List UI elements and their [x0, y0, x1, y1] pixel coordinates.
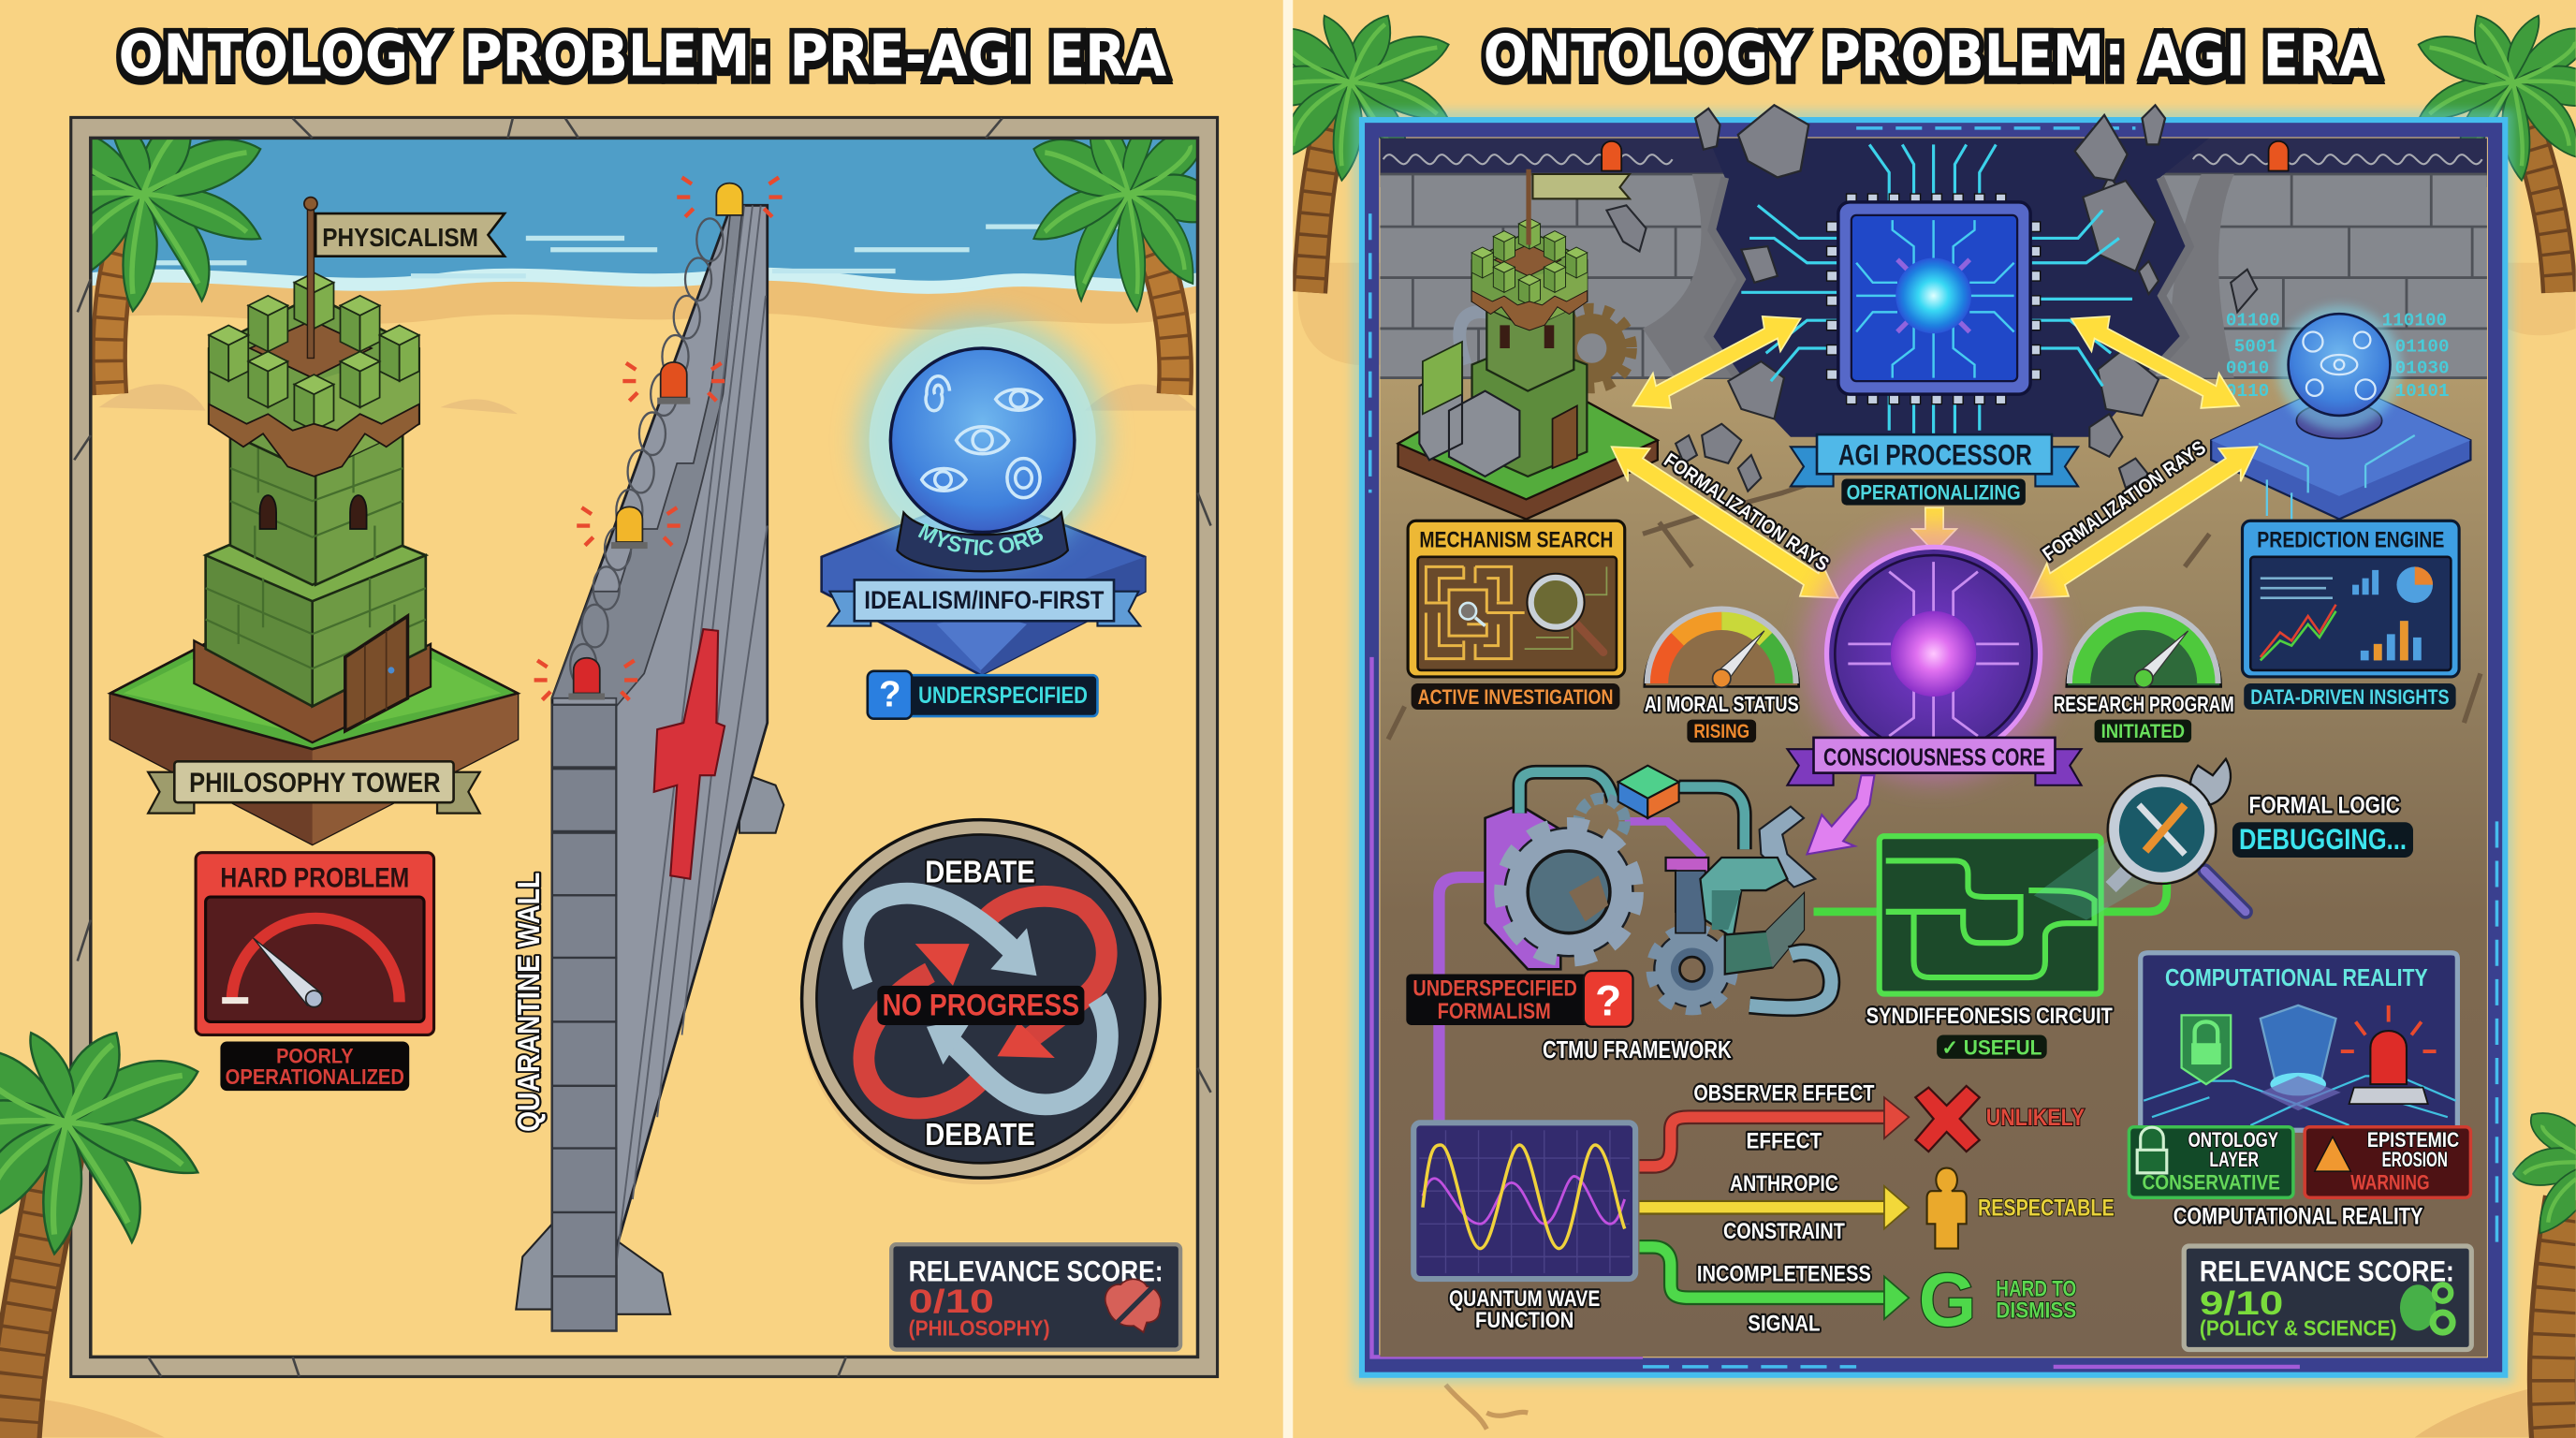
- tower door: [345, 616, 407, 731]
- alarm light: top: [677, 178, 783, 217]
- orb pedestal: [822, 492, 1145, 675]
- status: underspecified: UNDERSPECIFIED: [918, 683, 1088, 709]
- verdict: unlikely: UNLIKELY: [1986, 1106, 2085, 1131]
- icon: green lock: [2182, 1015, 2231, 1084]
- status: underspecified formalism: ?: [1595, 976, 1621, 1024]
- label: idealism/info-first: [828, 580, 1140, 626]
- alarm light: upper red: [622, 362, 724, 404]
- mini tower island: [1398, 169, 1658, 519]
- binary data: 5001: [2234, 337, 2277, 358]
- status: operationalizing: OPERATIONALIZING: [1847, 480, 2021, 504]
- tower foundation: [194, 640, 431, 742]
- label: idealism/info-first: IDEALISM/INFO-FIRST: [864, 585, 1105, 614]
- brick lines: [206, 447, 426, 668]
- gear behind tower: [1553, 309, 1632, 388]
- relevance score: pre-AGI: (PHILOSOPHY): [909, 1316, 1050, 1341]
- box: epistemic erosion: EPISTEMIC: [2367, 1128, 2459, 1152]
- hard problem gauge panel: [196, 853, 434, 1034]
- binary data: 01100: [2226, 310, 2280, 330]
- back gear: [1579, 799, 1625, 844]
- pipes: [1519, 772, 1745, 849]
- circuit wires outer: [1814, 871, 2167, 912]
- binary data: 0010: [2226, 358, 2269, 378]
- gauge: research program: INITIATED: [2101, 721, 2185, 742]
- verdict: hard to dismiss: HARD TO: [1996, 1277, 2076, 1301]
- status: data-driven insights: DATA-DRIVEN INSIGHTS: [2250, 685, 2450, 709]
- panel: prediction engine: [2242, 521, 2459, 677]
- palm tree: top right: [1032, 139, 1196, 395]
- circuit scene: [1380, 138, 2487, 1357]
- chip traces: [1856, 220, 2014, 378]
- label: CTMU framework: CTMU FRAMEWORK: [1543, 1037, 1732, 1064]
- icon: warning: [2315, 1137, 2350, 1171]
- icon: G: G: [1919, 1258, 1976, 1343]
- icon: brain and gears: [2400, 1284, 2452, 1332]
- quarantine wall: [516, 178, 783, 1330]
- status: poorly operationalized: [220, 1041, 409, 1091]
- relevance score: AGI: [2184, 1246, 2471, 1350]
- small gear: [1651, 928, 1734, 1010]
- flying rocks over frame: [1695, 105, 2165, 181]
- status: useful: ✓ USEFUL: [1941, 1036, 2042, 1060]
- orb ring: [870, 327, 1096, 553]
- label: debate top: DEBATE: [925, 855, 1035, 889]
- AGI processor chip: [1827, 194, 2041, 404]
- stone frame: [71, 117, 1218, 1376]
- palm tree: bottom left: [0, 1033, 198, 1438]
- binary data: 10101: [2395, 381, 2450, 402]
- label: syndiffeonesis: SYNDIFFEONESIS CIRCUIT: [1866, 1005, 2113, 1029]
- alarm light: lower red: [534, 658, 637, 700]
- background: right sand: [1290, 0, 2576, 1438]
- flying rocks: [1606, 176, 2257, 492]
- status: poorly operationalized: OPERATIONALIZED: [226, 1064, 404, 1089]
- panel: AGI era: [1255, 16, 2576, 1438]
- box: ontology layer: [2129, 1127, 2293, 1197]
- icon: red siren: [2341, 1005, 2437, 1104]
- icon: crossed brain: [1105, 1279, 1161, 1332]
- gauge: research program: RESEARCH PROGRAM: [2054, 692, 2234, 716]
- status: underspecified formalism: UNDERSPECIFIED: [1412, 976, 1577, 1001]
- arrow: anthropic constraint: ANTHROPIC: [1730, 1172, 1838, 1196]
- purple arrow to CTMU: [1807, 775, 1874, 854]
- top sky band: [1380, 138, 2487, 187]
- panel: computational reality: COMPUTATIONAL REALITY: [2165, 963, 2428, 991]
- barbed wire: [1383, 154, 2482, 164]
- alarm light: middle yellow: [577, 506, 681, 549]
- label: formalization rays right: FORMALIZATION RAYS: [2039, 437, 2210, 565]
- red cross: [654, 629, 724, 879]
- status: poorly operationalized: POORLY: [276, 1044, 354, 1067]
- broken wall: [1380, 174, 2487, 378]
- ground: [1380, 370, 2487, 1357]
- gauge needle: [254, 938, 322, 1005]
- label: debate bottom: DEBATE: [925, 1118, 1035, 1152]
- orb label path: [916, 536, 1051, 555]
- relevance score: pre-AGI: 0/10: [909, 1284, 994, 1320]
- label: formalization rays left: FORMALIZATION RAYS: [1660, 449, 1833, 576]
- machines: [1419, 359, 1519, 477]
- gauge arc: [232, 918, 400, 1002]
- gauge: AI moral status: AI MORAL STATUS: [1645, 692, 1799, 716]
- tower island base: [110, 588, 518, 844]
- wall front steps: [552, 205, 742, 707]
- loop arrowheads: [927, 928, 1037, 1064]
- icon: question: [1584, 971, 1632, 1027]
- box: epistemic erosion: WARNING: [2350, 1170, 2430, 1194]
- panel: prediction engine: PREDICTION ENGINE: [2257, 528, 2444, 552]
- yellow arrows: [1612, 316, 2257, 598]
- binary data: [2226, 310, 2450, 402]
- flag: [1526, 169, 1531, 244]
- label: philosophy tower: [148, 761, 480, 814]
- panel: mechanism search: [1408, 521, 1625, 677]
- orb symbols: [922, 376, 1042, 498]
- arrow: incompleteness signal: INCOMPLETENESS: [1697, 1263, 1871, 1287]
- CTMU framework machine: [1486, 766, 1832, 1010]
- verdict: hard to dismiss: [1996, 1277, 2076, 1323]
- icon: crystal cube: [2261, 1005, 2341, 1110]
- core center: [1891, 611, 1976, 697]
- icon: magnifier: [1527, 574, 1603, 653]
- sand cracks: [1445, 1385, 1528, 1430]
- wall bricks: [552, 705, 616, 1330]
- broken gear piece: [1760, 807, 1815, 888]
- philosophy tower: [110, 198, 518, 844]
- box: ontology layer: ONTOLOGY: [2188, 1128, 2278, 1152]
- label: consciousness core: [1787, 738, 2082, 785]
- wall body: [552, 205, 768, 1330]
- neon frame: [1362, 120, 2505, 1375]
- tower crown: [209, 272, 419, 477]
- tower windows: [260, 495, 367, 529]
- orb sphere: [890, 348, 1075, 533]
- panel: computational reality: [2141, 953, 2457, 1130]
- loop: blue arrows: [854, 893, 1107, 1105]
- arrow: observer effect: EFFECT: [1747, 1130, 1822, 1154]
- palm tree: bottom right: [2415, 1101, 2576, 1438]
- screen grid: [1419, 1130, 1630, 1273]
- mystic orb: [820, 301, 1147, 720]
- charts: [2261, 579, 2333, 598]
- orb label: mystic orb: MYSTIC ORB: [917, 522, 1043, 556]
- orb stand: [897, 512, 1068, 571]
- mini crown: [1471, 218, 1588, 330]
- binary data: 01030: [2395, 358, 2450, 378]
- verdict: hard to dismiss: DISMISS: [1996, 1299, 2076, 1323]
- hole in wall: [1708, 138, 2209, 437]
- panel: mechanism search: MECHANISM SEARCH: [1419, 528, 1613, 552]
- chip rays: [1741, 144, 2132, 435]
- icon: red X: [1915, 1086, 1980, 1152]
- alarm lights on wall: [1602, 141, 2289, 170]
- arrow: anthropic constraint: CONSTRAINT: [1723, 1220, 1845, 1244]
- circuit floor: [2144, 1076, 2456, 1125]
- icon: debug magnifier: [2034, 759, 2246, 920]
- magenta wave: [1423, 1176, 1625, 1224]
- icon: lock: [2137, 1127, 2167, 1173]
- background: left sand: [0, 0, 1286, 1438]
- label: quantum wave function: [1449, 1287, 1600, 1333]
- panel: Pre-AGI era: [0, 23, 1219, 1438]
- box: epistemic erosion: EROSION: [2382, 1148, 2448, 1171]
- verdict: respectable: RESPECTABLE: [1978, 1196, 2115, 1221]
- relevance score: pre-AGI: RELEVANCE SCORE:: [909, 1255, 1164, 1288]
- icon: person: [1927, 1168, 1967, 1249]
- label: computational reality: COMPUTATIONAL REALITY: [2174, 1204, 2423, 1229]
- ground cracks: [1388, 485, 2481, 740]
- label: quantum wave function: FUNCTION: [1475, 1309, 1573, 1333]
- label: AGI processor: [1791, 434, 2078, 486]
- status: underspecified: ?: [879, 675, 901, 715]
- no progress label: NO PROGRESS: [883, 988, 1079, 1021]
- beach scene: [92, 139, 1196, 414]
- machine purple housing: [1486, 805, 1560, 969]
- quantum wave screen: [1413, 1123, 1635, 1279]
- curled pipe: [1749, 952, 1832, 1008]
- status: debugging: DEBUGGING...: [2239, 822, 2407, 856]
- relevance score: AGI: RELEVANCE SCORE:: [2200, 1255, 2454, 1288]
- binary data: 01100: [2395, 337, 2450, 358]
- relevance score: pre-AGI: [891, 1244, 1180, 1350]
- arrow: observer effect: OBSERVER EFFECT: [1693, 1082, 1875, 1107]
- palm tree: top left: [92, 139, 262, 395]
- label: formal logic: FORMAL LOGIC: [2249, 794, 2400, 819]
- relevance score: AGI: (POLICY & SCIENCE): [2200, 1316, 2396, 1341]
- wall buttresses: [516, 772, 783, 1314]
- status: active investigation: ACTIVE INVESTIGATION: [1418, 685, 1613, 709]
- label: AGI processor: AGI PROCESSOR: [1838, 438, 2032, 472]
- syndiffeonesis circuit: [1880, 836, 2101, 994]
- pie chart: [2396, 566, 2433, 603]
- plank: [1725, 894, 1804, 975]
- tower body: [1472, 342, 1587, 477]
- pipe: [1459, 312, 1486, 365]
- gauge: AI moral status: RISING: [1693, 721, 1749, 742]
- orb glow: [857, 315, 1107, 565]
- binary data: 0110: [2226, 381, 2269, 402]
- binary data: 110100: [2382, 310, 2447, 330]
- arrow: incompleteness signal: [1640, 1247, 1909, 1336]
- palm tree: top left: [1293, 14, 1450, 365]
- title: pre-AGI: ONTOLOGY PROBLEM: PRE-AGI ERA: [119, 23, 1167, 90]
- maze: [1426, 566, 1525, 659]
- status: underspecified: [868, 671, 1097, 719]
- faint blueprint: [1525, 566, 1606, 649]
- small magnifier: [1460, 603, 1486, 626]
- relevance score: AGI: 9/10: [2200, 1285, 2283, 1322]
- hole rubble fringe: [1708, 178, 2189, 394]
- palm trees and outer sand: [1255, 16, 2576, 1438]
- machine blocks: [1666, 858, 1708, 912]
- label: quarantine wall: QUARANTINE WALL: [512, 873, 547, 1132]
- arrow: anthropic constraint: [1640, 1172, 1909, 1244]
- arrow: observer effect: [1640, 1082, 1909, 1167]
- box: ontology layer: LAYER: [2209, 1148, 2259, 1171]
- gauge: AI moral status: [1645, 609, 1799, 742]
- palm tree: top right: [2419, 16, 2576, 335]
- label: philosophy tower: PHILOSOPHY TOWER: [189, 768, 441, 799]
- label: consciousness core: CONSCIOUSNESS CORE: [1823, 743, 2045, 771]
- status: underspecified formalism: FORMALISM: [1438, 1000, 1551, 1024]
- status: underspecified formalism: [1406, 971, 1632, 1027]
- flag: physicalism: PHYSICALISM: [322, 223, 478, 252]
- purple pipe: [1439, 877, 1488, 1121]
- arrow: incompleteness signal: SIGNAL: [1748, 1312, 1821, 1336]
- loop: red arrows: [864, 896, 1106, 1108]
- consciousness core: [1806, 526, 2061, 782]
- tower body: [206, 418, 426, 707]
- hard problem gauge panel: HARD PROBLEM: [220, 863, 409, 894]
- debate loop badge: [800, 820, 1162, 1184]
- mini orb platform: [2211, 305, 2470, 519]
- chip core: [1895, 257, 1971, 333]
- gauge: research program: [2054, 609, 2234, 742]
- large gear: [1501, 825, 1636, 960]
- title: AGI: ONTOLOGY PROBLEM: AGI ERA: [1484, 23, 2379, 90]
- flag: physicalism: [304, 198, 505, 359]
- box: ontology layer: CONSERVATIVE: [2142, 1170, 2280, 1194]
- frame glow: [1358, 117, 2507, 1376]
- cube: [1618, 766, 1679, 818]
- box: epistemic erosion: [2305, 1127, 2470, 1197]
- yellow wave: [1423, 1145, 1625, 1249]
- panel divider: [1283, 0, 1293, 1438]
- barbed wire: [570, 218, 723, 686]
- label: quantum wave function: QUANTUM WAVE: [1449, 1287, 1600, 1312]
